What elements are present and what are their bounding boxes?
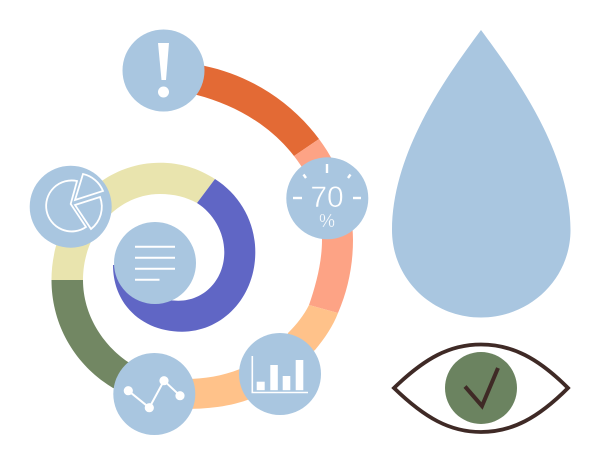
inner blue ring [113,179,255,332]
icon: 70 percent gauge: % [319,211,335,231]
icon: pie chart [30,166,112,248]
icon: 70 percent gauge [286,157,368,239]
outer spiral ring [52,62,353,409]
icon: line chart [113,353,195,435]
icon: bar chart [239,333,321,415]
icon: 70 percent gauge: 70 [310,181,344,214]
icon: eye with check [394,344,568,432]
icon: exclamation [122,30,204,112]
icon: text lines [114,222,196,304]
water drop [392,30,570,318]
